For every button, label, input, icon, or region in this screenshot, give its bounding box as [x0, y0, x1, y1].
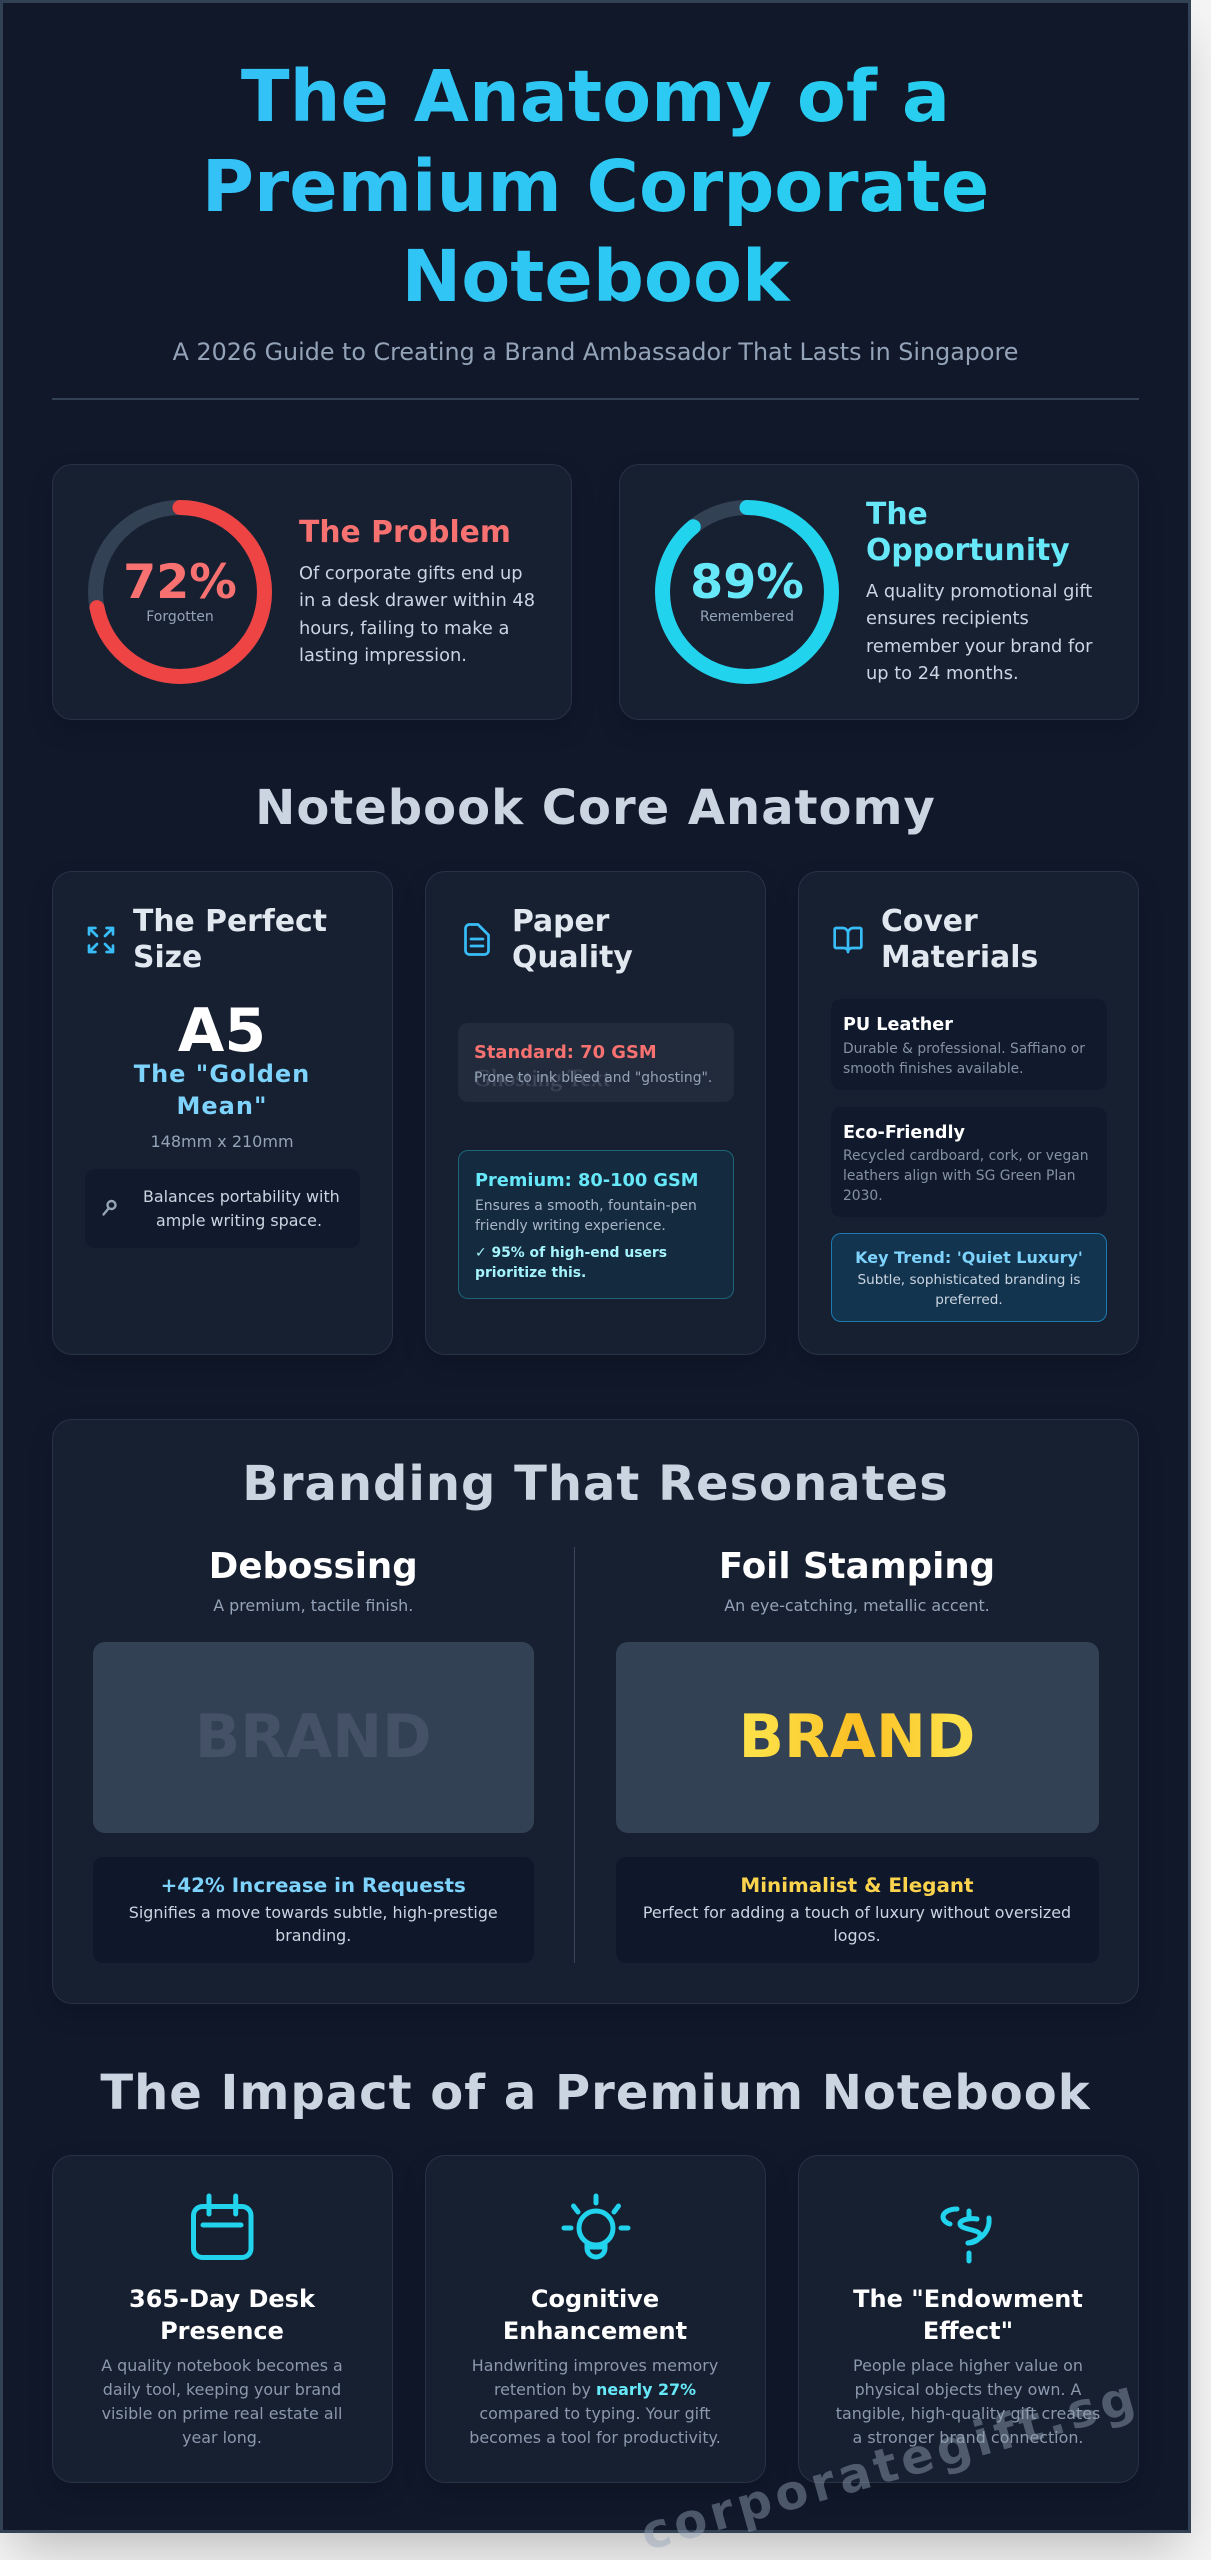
text: desk presence description: year long. [182, 2428, 262, 2447]
text: debossing detail [129, 1902, 498, 1945]
heading: minimalist and elegant: Minimalist & Elegant [740, 1874, 974, 1897]
heading: desk presence [129, 2285, 316, 2345]
text: cognitive description: becomes a tool for productivity. [469, 2428, 721, 2447]
panel: endowment effect [798, 2155, 1139, 2483]
text: problem description [299, 563, 535, 666]
title: Premium Corporate [202, 145, 989, 228]
icon: open book [833, 926, 863, 954]
text: premium description: Ensures a smooth, fountain-pen [475, 1198, 697, 1214]
text: problem description: hours, failing to make a [299, 618, 509, 639]
stat label: remembered: Remembered [700, 609, 794, 625]
text: PU leather description: smooth finishes available. [843, 1061, 1024, 1077]
text: opportunity description: remember your brand for [866, 636, 1092, 657]
text: foil detail: Perfect for adding a touch of luxury without oversized [643, 1902, 1071, 1922]
callout: requests increase [92, 1857, 534, 1963]
subtitle: A 2026 Guide to Creating a Brand Ambassador That Lasts in Singapore [173, 338, 1018, 366]
heading: cover materials [881, 904, 1038, 974]
text: cognitive description [469, 2356, 721, 2447]
heading: debossing: Debossing [209, 1546, 418, 1587]
panel: the perfect size [52, 871, 393, 1355]
donut chart: 89% remembered [655, 500, 839, 684]
heading: the opportunity: Opportunity [866, 532, 1070, 568]
icon: magnifier [102, 1200, 117, 1216]
text: foil detail: logos. [833, 1926, 881, 1945]
ghosting text sample: Ghosting Text [474, 1066, 610, 1092]
watermark: corporategift.sg [635, 2368, 1145, 2560]
heading: the problem: The Problem [299, 515, 511, 550]
subheading: golden mean: The "Golden [134, 1060, 310, 1088]
text: portability benefit: ample writing space. [156, 1211, 322, 1230]
text: problem description: lasting impression. [299, 645, 467, 666]
text: premium description: friendly writing experience. [475, 1218, 666, 1234]
text: trend description: Subtle, sophisticated branding is [857, 1272, 1081, 1288]
text: trend description: preferred. [935, 1292, 1003, 1308]
text: standard description: Prone to ink bleed and "ghosting". [474, 1070, 712, 1086]
text: desk presence description: A quality notebook becomes a [101, 2356, 343, 2375]
heading: the opportunity: The [866, 497, 928, 532]
text: opportunity description [866, 581, 1092, 684]
heading: the perfect size: Size [133, 940, 202, 974]
heading: branding that resonates: Branding That Resonates [242, 1456, 949, 1512]
heading: the perfect size: The Perfect [133, 904, 327, 939]
text: problem description: Of corporate gifts end up [299, 563, 523, 584]
title: Notebook [401, 235, 790, 318]
icon: expand arrows [88, 926, 114, 954]
text: endowment description: People place higher value on [853, 2356, 1083, 2375]
text: endowment description [836, 2356, 1100, 2447]
icon: light bulb [562, 2194, 630, 2260]
stat label: forgotten: Forgotten [146, 609, 214, 625]
heading: the perfect size [133, 904, 327, 974]
text: eco-friendly description: leathers align with SG Green Plan [843, 1168, 1075, 1184]
subheading: golden mean: Mean" [177, 1092, 267, 1120]
heading: paper quality: Quality [512, 940, 633, 974]
text: endowment description: physical objects they own. A [855, 2380, 1081, 2399]
heading: the opportunity [866, 497, 1070, 568]
text: opportunity description: up to 24 months. [866, 663, 1019, 684]
text: trend description [857, 1272, 1081, 1308]
stat: 72%: 72% [123, 555, 237, 610]
text: eco-friendly description [843, 1148, 1088, 1204]
heading: premium 80-100 gsm: Premium: 80-100 GSM [475, 1170, 698, 1191]
text: problem description: in a desk drawer within 48 [299, 590, 535, 611]
icon: calendar [191, 2194, 254, 2260]
heading: paper quality [512, 904, 633, 974]
text: opportunity description: A quality promotional gift [866, 581, 1092, 602]
heading: endowment effect: The "Endowment [853, 2285, 1083, 2313]
panel: cognitive enhancement [425, 2155, 766, 2483]
material: PU leather [831, 999, 1107, 1090]
stat: 89%: 89% [690, 555, 804, 610]
text: eco-friendly description: Recycled cardboard, cork, or vegan [843, 1148, 1088, 1164]
text: eco-friendly description: 2030. [843, 1188, 883, 1204]
text: foil tagline: An eye-catching, metallic accent. [724, 1596, 990, 1615]
heading: endowment effect [853, 2285, 1083, 2345]
text: cognitive description: retention by nearly 27% [494, 2380, 696, 2399]
text: debossing detail: Signifies a move towards subtle, high-prestige [129, 1902, 498, 1922]
heading: paper quality: Paper [512, 904, 609, 939]
callout: key trend [831, 1233, 1107, 1322]
text: debossing detail: branding. [275, 1926, 351, 1945]
heading: eco-friendly: Eco-Friendly [843, 1123, 965, 1143]
callout: portability [85, 1169, 360, 1248]
heading: cover materials: Cover [881, 904, 978, 939]
heading: desk presence: 365-Day Desk [129, 2285, 315, 2313]
stat: +42% increase: +42% Increase in Requests [161, 1874, 466, 1897]
subheading: golden mean [134, 1060, 310, 1120]
donut chart: 72% forgotten [88, 500, 272, 684]
text: PU leather description [843, 1041, 1085, 1077]
heading: foil stamping: Foil Stamping [719, 1546, 995, 1587]
text: debossing tagline: A premium, tactile finish. [213, 1596, 413, 1615]
text: desk presence description [101, 2356, 343, 2447]
heading: PU leather: PU Leather [843, 1015, 953, 1035]
panel: 365-day desk presence [52, 2155, 393, 2483]
icon: document [464, 923, 490, 956]
text: endowment description: tangible, high-quality gift creates [836, 2404, 1100, 2423]
column: foil stamping [616, 1546, 1099, 1963]
text: premium description [475, 1198, 697, 1234]
panel: the problem [52, 464, 572, 720]
text: endowment description: a stronger brand connection. [853, 2428, 1083, 2447]
panel: standard paper [458, 1023, 734, 1102]
text: portability benefit [143, 1187, 340, 1230]
heading: standard 70 gsm: Standard: 70 GSM [474, 1042, 657, 1063]
title: The Anatomy of a [241, 55, 950, 138]
panel: the opportunity [619, 464, 1139, 720]
heading: the impact of a premium notebook: The Impact of a Premium Notebook [100, 2065, 1091, 2121]
text: PU leather description: Durable & professional. Saffiano or [843, 1041, 1085, 1057]
heading: desk presence: Presence [160, 2317, 284, 2345]
heading: cognitive enhancement [503, 2285, 687, 2345]
callout: minimalist and elegant [616, 1857, 1098, 1963]
panel: paper quality [425, 871, 766, 1355]
foil brand text [616, 1704, 1098, 1772]
panel: branding that resonates [52, 1419, 1139, 2004]
text: dimensions: 148mm x 210mm [150, 1132, 294, 1151]
text: foil detail [643, 1902, 1071, 1945]
icon: dollar mark [940, 2206, 992, 2264]
text: premium statistic [475, 1245, 667, 1281]
text: cognitive description: compared to typing. Your gift [479, 2404, 711, 2423]
heading: cognitive enhancement: Enhancement [503, 2317, 687, 2345]
heading: cover materials: Materials [881, 940, 1038, 974]
heading: cognitive enhancement: Cognitive [531, 2285, 659, 2313]
text: premium statistic: ✓ 95% of high-end users [475, 1245, 667, 1261]
material: eco-friendly [831, 1107, 1107, 1217]
foil brand text: BRAND [739, 1703, 975, 1772]
text: cognitive description: Handwriting improves memory [472, 2356, 718, 2375]
column: debossing [93, 1546, 534, 1963]
text: premium statistic: prioritize this. [475, 1265, 586, 1281]
mockup: debossed brand [92, 1642, 534, 1833]
panel: cover materials [798, 871, 1139, 1355]
mockup: foil brand [616, 1642, 1098, 1833]
heading: quiet luxury: Key Trend: 'Quiet Luxury' [855, 1248, 1083, 1267]
panel: premium paper [458, 1150, 734, 1299]
text: portability benefit: Balances portability with [143, 1187, 340, 1206]
heading: endowment effect: Effect" [923, 2317, 1013, 2345]
title [0, 52, 1191, 322]
stat: A5: A5 [178, 996, 266, 1066]
heading: notebook core anatomy: Notebook Core Anatomy [255, 780, 936, 836]
text: desk presence description: daily tool, keeping your brand [103, 2380, 341, 2399]
debossed brand text: BRAND [195, 1703, 432, 1772]
text: opportunity description: ensures recipients [866, 608, 1029, 629]
text: desk presence description: visible on prime real estate all [102, 2404, 342, 2423]
